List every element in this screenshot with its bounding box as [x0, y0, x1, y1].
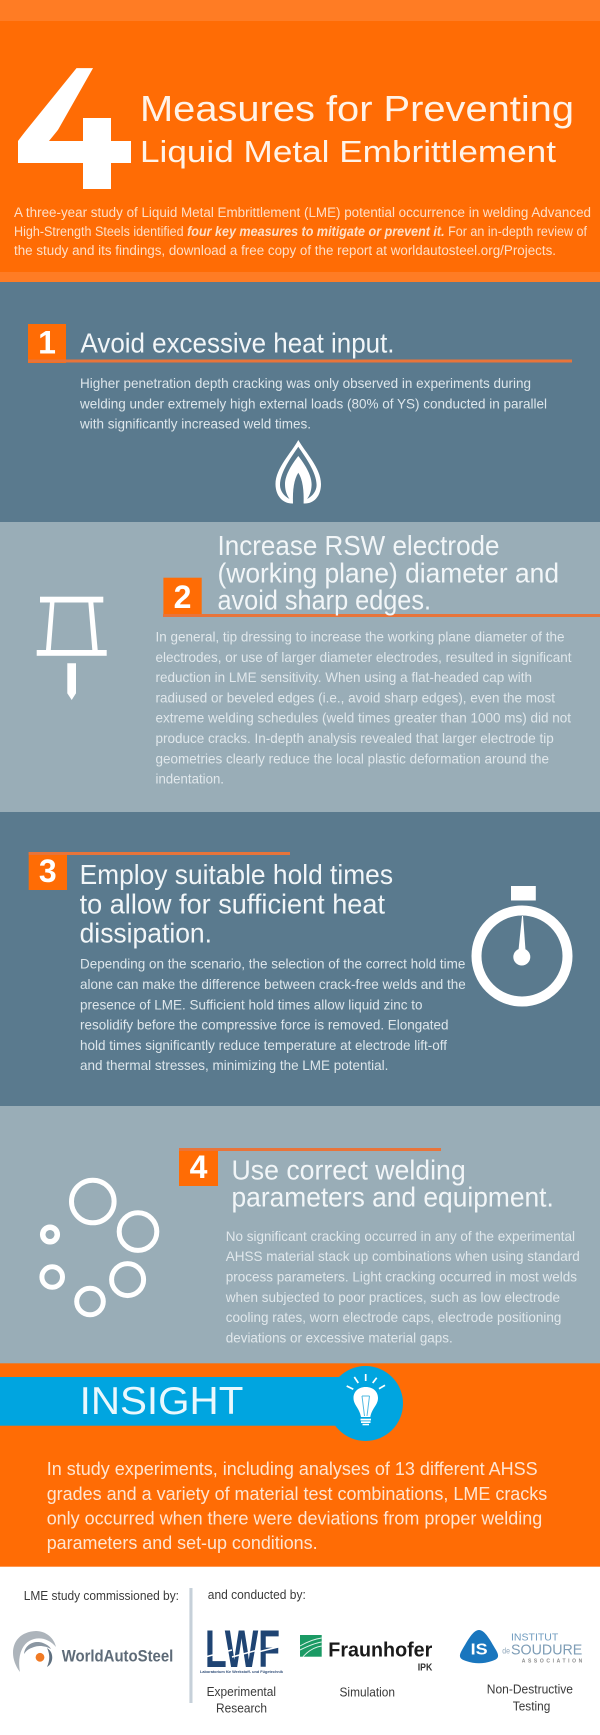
intro paragraph: A three-year study of Liquid Metal Embrittlement (LME) potential occurrence in welding Advanced [14, 205, 591, 220]
heading 1: Avoid excessive heat input. [80, 328, 394, 358]
number badge 2 [163, 578, 600, 617]
conducted by label: and conducted by: [208, 1588, 306, 1602]
icon: rings [42, 1180, 157, 1315]
title [140, 88, 574, 169]
commissioned by label: LME study commissioned by: [24, 1589, 179, 1603]
body text 2: electrodes, or use of larger diameter electrodes, resulted in significant [156, 649, 572, 665]
body text 2: extreme welding schedules (weld times greater than 1000 ms) did not [156, 710, 571, 726]
logo: LWF [200, 1620, 283, 1679]
number badge 1: 1 [38, 324, 56, 360]
heading 4: Use correct welding [232, 1154, 466, 1185]
body text 3: presence of LME. Sufficient hold times allow liquid zinc to [80, 996, 423, 1012]
intro paragraph [14, 205, 591, 258]
insight text [47, 1459, 547, 1553]
logo: Institut de Soudure: INSTITUT [511, 1633, 558, 1644]
body text 2: radiused or beveled edges (i.e., avoid sharp edges), even the most [156, 689, 555, 705]
number badge 4 [179, 1148, 441, 1186]
number badge 3 [29, 852, 290, 890]
body text 2: In general, tip dressing to increase the working plane diameter of the [156, 629, 565, 645]
intro paragraph: High-Strength Steels identified four key measures to mitigate or prevent it. For an in-depth review of [14, 224, 587, 239]
heading 3 [80, 859, 393, 949]
number badge 3: 3 [39, 853, 57, 889]
title: Measures for Preventing [140, 88, 574, 129]
logo: Institut de Soudure: ASSOCIATION [522, 1658, 583, 1664]
logo: Institut de Soudure: IS [471, 1641, 488, 1658]
body text 3: hold times significantly reduce temperature at electrode lift-off [80, 1037, 447, 1053]
heading 3: dissipation. [80, 918, 212, 949]
insight banner [0, 1366, 403, 1441]
heading 4: parameters and equipment. [232, 1181, 554, 1212]
logo: Institut de Soudure: SOUDURE [511, 1641, 582, 1658]
body text 4: No significant cracking occurred in any of the experimental [226, 1228, 575, 1244]
heading 2: (working plane) diameter and [218, 557, 559, 588]
logo: Fraunhofer IPK: IPK [418, 1662, 433, 1674]
caption: simulation: Simulation [340, 1686, 395, 1700]
body text 1: welding under extremely high external loads (80% of YS) conducted in parallel [79, 395, 547, 411]
heading 2: avoid sharp edges. [218, 584, 431, 616]
body text 3: alone can make the difference between crack-free welds and the [80, 976, 466, 992]
heading 3: to allow for sufficient heat [80, 889, 385, 920]
body text 4 [225, 1228, 580, 1345]
panel: credits footer [13, 1588, 583, 1716]
body text 2: indentation. [156, 771, 224, 787]
panel: measure 3 [0, 812, 600, 1106]
caption: experimental research: Experimental [207, 1685, 276, 1699]
logo: Institut de Soudure [460, 1630, 583, 1664]
insight text: parameters and set-up conditions. [47, 1533, 318, 1553]
insight text: In study experiments, including analyses of 13 different AHSS [47, 1459, 538, 1479]
panel: measure 2 [0, 522, 600, 812]
logo: LWF: Laboratorium für Werkstoff- und Fügetechnik [200, 1670, 283, 1674]
big number 4: 4 [13, 35, 132, 226]
intro paragraph: the study and its findings, download a free copy of the report at worldautosteel.org/Projects. [14, 243, 556, 258]
icon: flame [276, 440, 321, 504]
body text 4: process parameters. Light cracking occurred in most welds [226, 1268, 577, 1284]
body text 4: cooling rates, worn electrode caps, electrode positioning [226, 1309, 561, 1325]
title: Liquid Metal Embrittlement [140, 134, 556, 169]
body text 2: produce cracks. In-depth analysis revealed that larger electrode tip [156, 730, 554, 746]
body text 2 [156, 629, 572, 787]
body text 3: resolidify before the compressive force is removed. Elongated [80, 1017, 448, 1033]
body text 3 [80, 956, 466, 1073]
body text 3: and thermal stresses, minimizing the LME potential. [80, 1057, 388, 1073]
panel: measure 4 [0, 1106, 600, 1364]
body text 1: with significantly increased weld times. [79, 416, 311, 432]
number badge 4: 4 [190, 1149, 208, 1185]
logo: Institut de Soudure: de [502, 1646, 510, 1655]
number badge 2: 2 [174, 579, 191, 615]
logo: LWF: LWF [205, 1620, 280, 1679]
body text 1 [79, 375, 547, 432]
panel: header [0, 0, 600, 282]
caption: experimental research: Research [216, 1702, 267, 1716]
panel: insight [0, 1363, 600, 1567]
body text 2: geometries clearly reduce the local plastic deformation around the [156, 750, 549, 766]
heading 4 [232, 1154, 554, 1212]
number badge 1 [28, 324, 572, 363]
caption: non-destructive testing: Testing [513, 1700, 550, 1714]
heading 2: Increase RSW electrode [218, 530, 500, 561]
icon: stopwatch [476, 886, 568, 1002]
body text 4: deviations or excessive material gaps. [226, 1329, 453, 1345]
body text 4: AHSS material stack up combinations when using standard [226, 1248, 580, 1264]
panel: measure 1 [0, 282, 600, 522]
insight text: grades and a variety of material test combinations, LME cracks [47, 1484, 547, 1504]
logo: WorldAutoSteel: WorldAutoSteel [62, 1647, 173, 1666]
body text 1: Higher penetration depth cracking was only observed in experiments during [80, 375, 531, 391]
insight banner: INSIGHT [80, 1380, 243, 1423]
body text 4: when subjected to poor practices, such as low electrode [225, 1289, 560, 1305]
icon: electrode [37, 597, 107, 700]
caption: non-destructive testing: Non-Destructive [487, 1682, 573, 1696]
logo: Fraunhofer IPK: Fraunhofer [328, 1640, 433, 1662]
caption: non-destructive testing [487, 1682, 573, 1714]
heading 2 [218, 530, 559, 616]
icon: light bulb [347, 1374, 385, 1425]
heading 3: Employ suitable hold times [80, 859, 393, 890]
logo: Fraunhofer IPK [300, 1635, 433, 1674]
caption: experimental research [207, 1685, 276, 1716]
logo: WorldAutoSteel [13, 1631, 173, 1672]
insight text: only occurred when there were deviations from proper welding [47, 1508, 542, 1528]
body text 3: Depending on the scenario, the selection of the correct hold time [80, 956, 466, 972]
body text 2: reduction in LME sensitivity. When using a flat-headed cap with [156, 669, 532, 685]
